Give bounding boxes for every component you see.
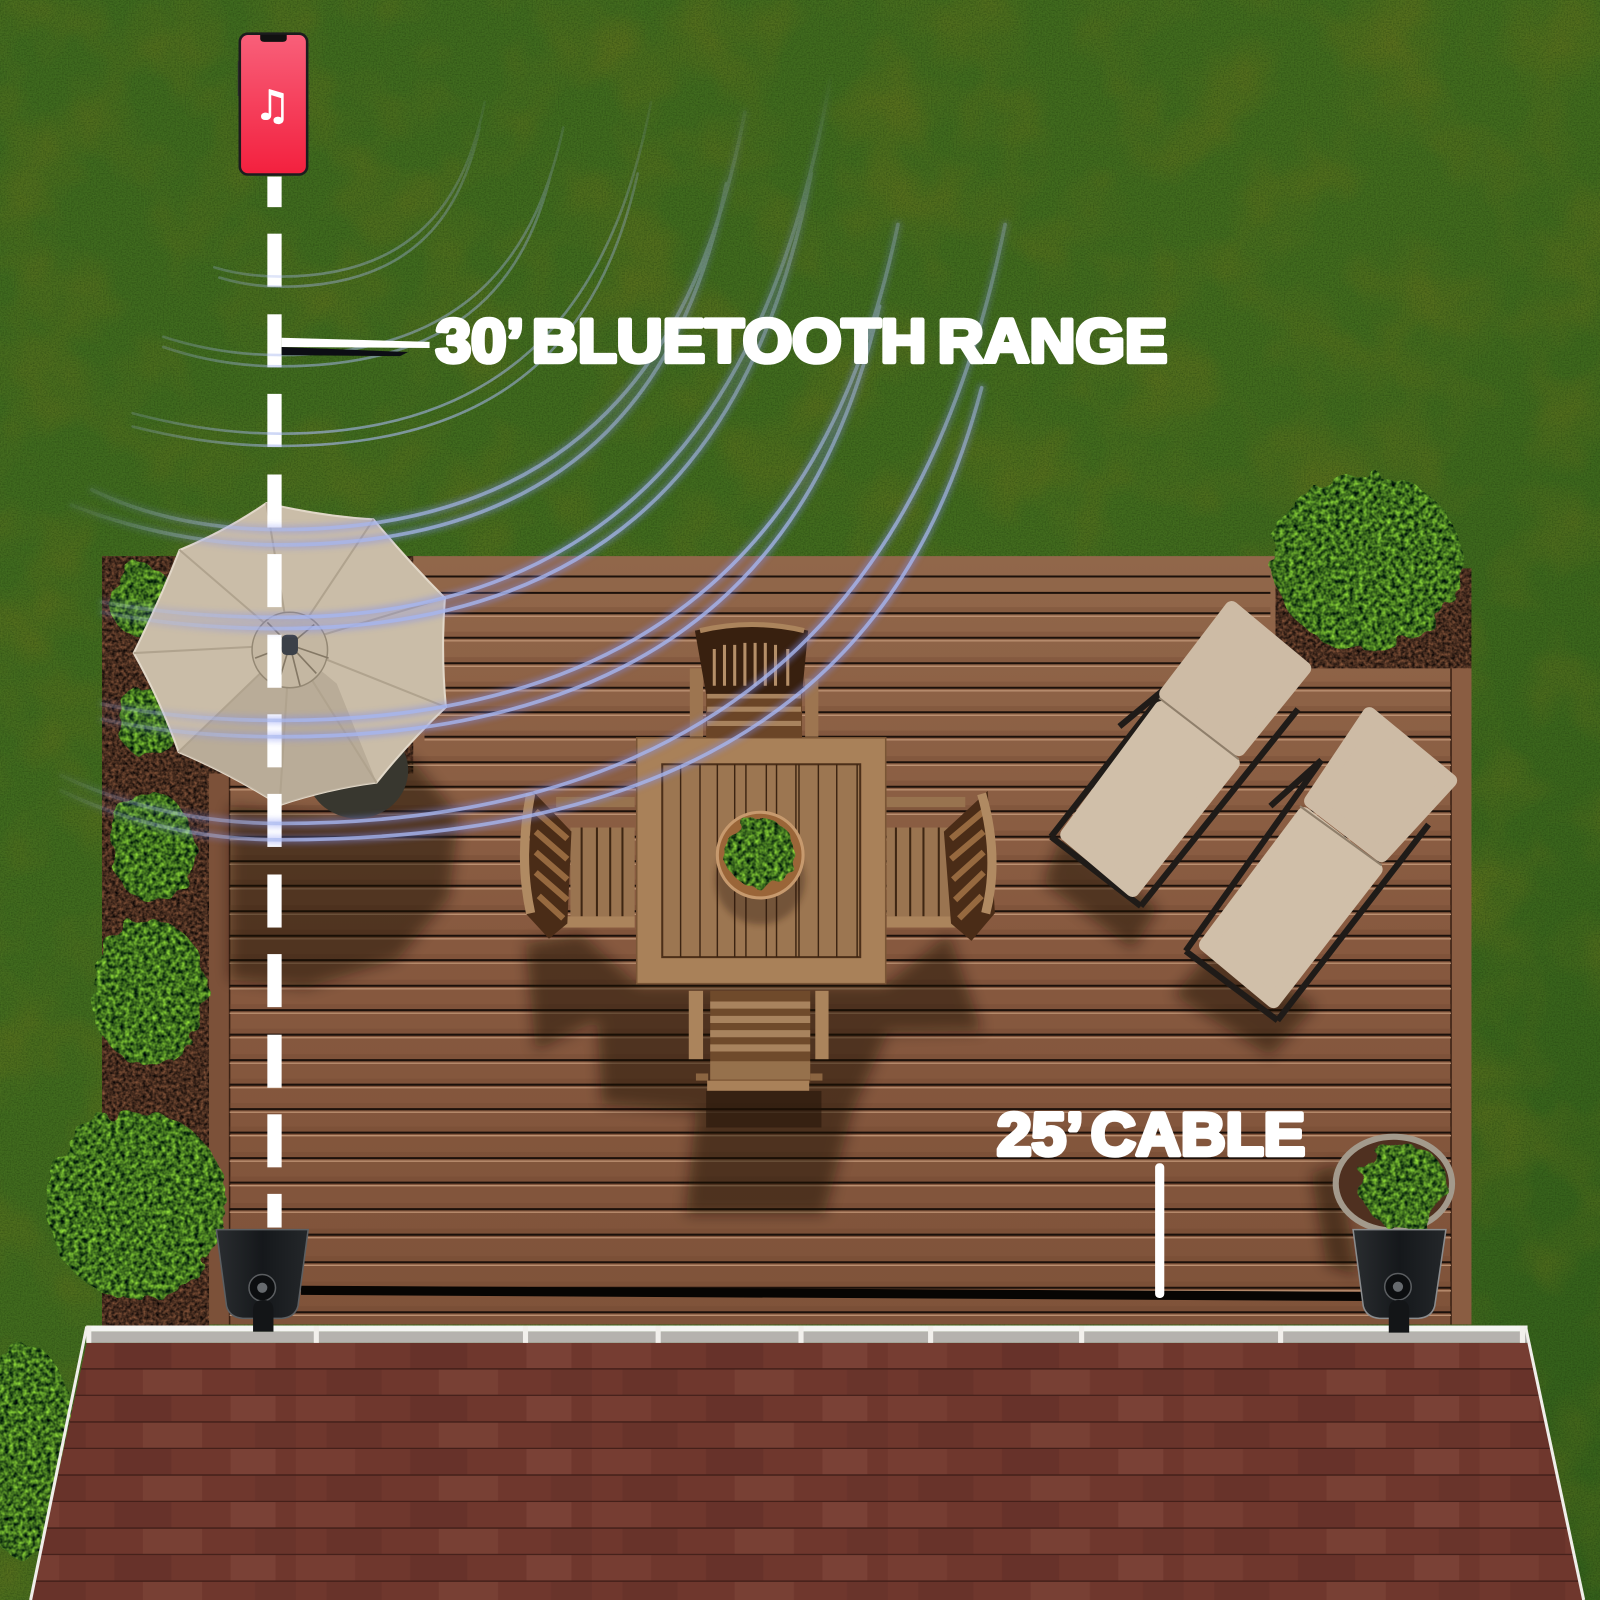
garden mulch beds <box>102 556 1471 1327</box>
wooden deck <box>209 556 1471 1324</box>
gutter <box>87 1326 1528 1343</box>
dashed range line <box>267 177 282 1228</box>
leader line to cable <box>1155 1163 1164 1298</box>
leader line to bluetooth label <box>282 338 430 356</box>
planter foliage <box>726 818 795 888</box>
phone with music app <box>238 34 307 174</box>
wave glow <box>61 71 1005 840</box>
speaker: left <box>216 1230 308 1332</box>
label: bluetooth range: 30’ BLUETOOTH RANGE <box>436 307 1167 375</box>
chair: left <box>524 791 635 939</box>
shrub: beside roof <box>0 1342 76 1556</box>
umbrella base <box>306 722 408 818</box>
shrub: top right <box>1272 474 1462 650</box>
shrub: bottom left large <box>46 1110 226 1298</box>
shrub: left 4 <box>92 918 206 1065</box>
chair: right <box>887 791 995 941</box>
shrubs <box>0 474 1462 1556</box>
patio umbrella <box>134 503 446 805</box>
shrub: left 2 <box>117 690 172 755</box>
shrub: left 3 <box>111 792 193 902</box>
rear planter foliage <box>1361 1144 1447 1230</box>
cable <box>301 1286 1362 1301</box>
wave lines <box>61 71 1005 840</box>
table with planter <box>637 738 886 984</box>
umbrella hub <box>252 612 328 688</box>
lounger: left <box>1051 608 1304 906</box>
planter shadow <box>715 835 805 924</box>
rear planter <box>1336 1137 1452 1231</box>
music note: ♫ <box>254 81 291 129</box>
planter bowl <box>717 812 803 898</box>
chair: bottom <box>689 991 829 1128</box>
speaker: right <box>1353 1230 1446 1333</box>
roof <box>0 1327 1600 1600</box>
bluetooth signal waves <box>61 71 1005 840</box>
lounger cushions <box>1311 714 1450 855</box>
cast shadows on deck <box>230 755 1357 1276</box>
lounger cushions <box>1166 608 1304 749</box>
lounger: right <box>1186 714 1450 1020</box>
shrub: left 1 <box>110 566 176 638</box>
chair: top <box>690 624 818 738</box>
label: cable: 25’ CABLE <box>997 1101 1305 1168</box>
